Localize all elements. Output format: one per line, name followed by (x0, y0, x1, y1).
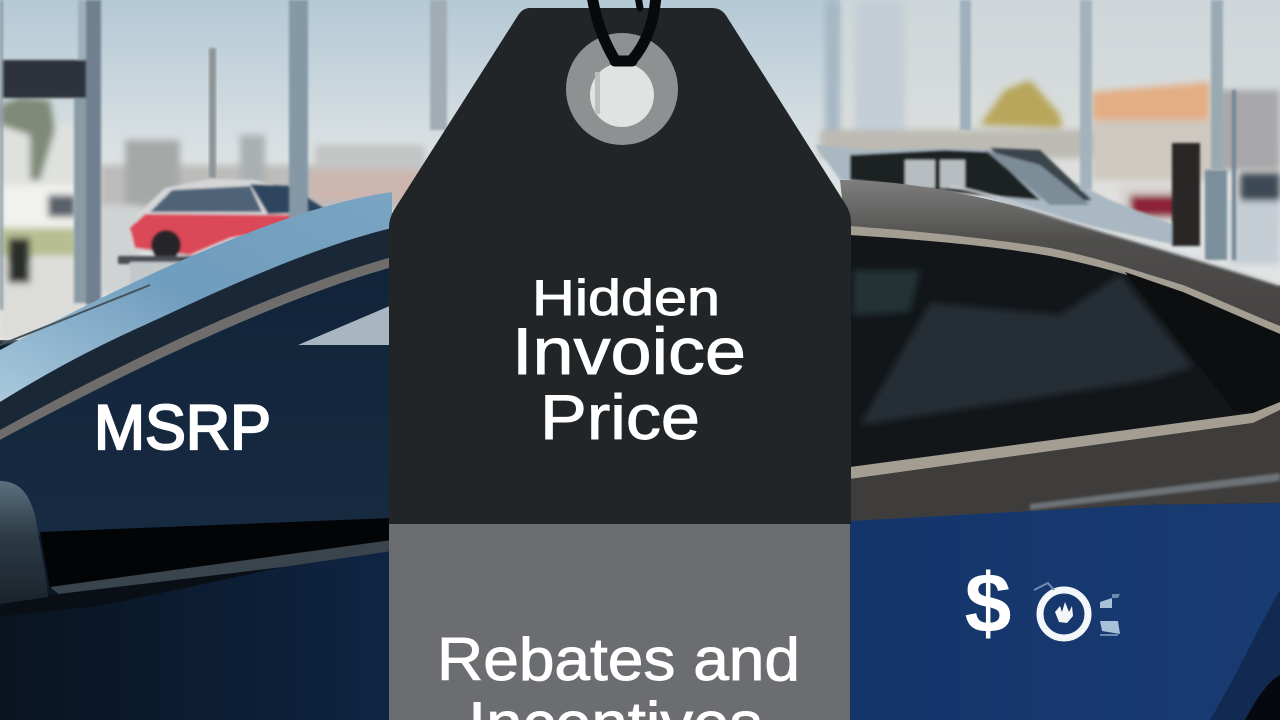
side mirror (0, 481, 48, 604)
lower chrome strip (850, 402, 1280, 479)
tag text: Hidden Invoice Price (512, 270, 746, 453)
rear pillar (1125, 272, 1280, 413)
car: right side (840, 180, 1280, 720)
showroom posts left (0, 0, 447, 310)
icon: dollar sign: $ (965, 556, 1011, 650)
lower body (0, 540, 392, 720)
car: left side (0, 192, 392, 720)
black window seal (40, 518, 392, 589)
hanging cord (592, 0, 656, 61)
icon: motion bars (1100, 594, 1120, 636)
side window (0, 267, 392, 535)
tag text: Rebates and Incentives: Rebates and (437, 626, 800, 693)
showroom right background (820, 0, 1280, 265)
chrome strip (850, 226, 1280, 334)
tag text: Hidden Invoice Price: Hidden (532, 270, 720, 326)
door band (850, 410, 1280, 522)
window interior: seats (860, 275, 1193, 425)
roof (840, 180, 1280, 330)
window reflection (298, 305, 392, 345)
windshield glass (0, 192, 392, 402)
background: dealership showroom windows (0, 0, 1280, 340)
window interior: left reflection (853, 270, 920, 316)
tag upper panel (389, 8, 851, 524)
tag text: Hidden Invoice Price: Price (540, 383, 700, 453)
chrome strip (0, 257, 392, 440)
showroom posts right (960, 0, 1236, 260)
red car in background (118, 179, 330, 296)
pole (209, 48, 216, 178)
side window (850, 235, 1280, 467)
label: MSRP: MSRP (94, 393, 271, 463)
tag text: Rebates and Incentives (437, 626, 800, 720)
icon: coin with flame (1034, 583, 1088, 638)
tag lower panel (389, 524, 850, 720)
blurred buildings left (0, 97, 430, 340)
dark roof frame (0, 228, 392, 432)
tag text: Hidden Invoice Price: Invoice (512, 314, 746, 388)
background parked car (815, 143, 1227, 260)
price tag (389, 0, 851, 720)
eyelet ring (566, 33, 678, 145)
blue door panel (850, 503, 1280, 720)
